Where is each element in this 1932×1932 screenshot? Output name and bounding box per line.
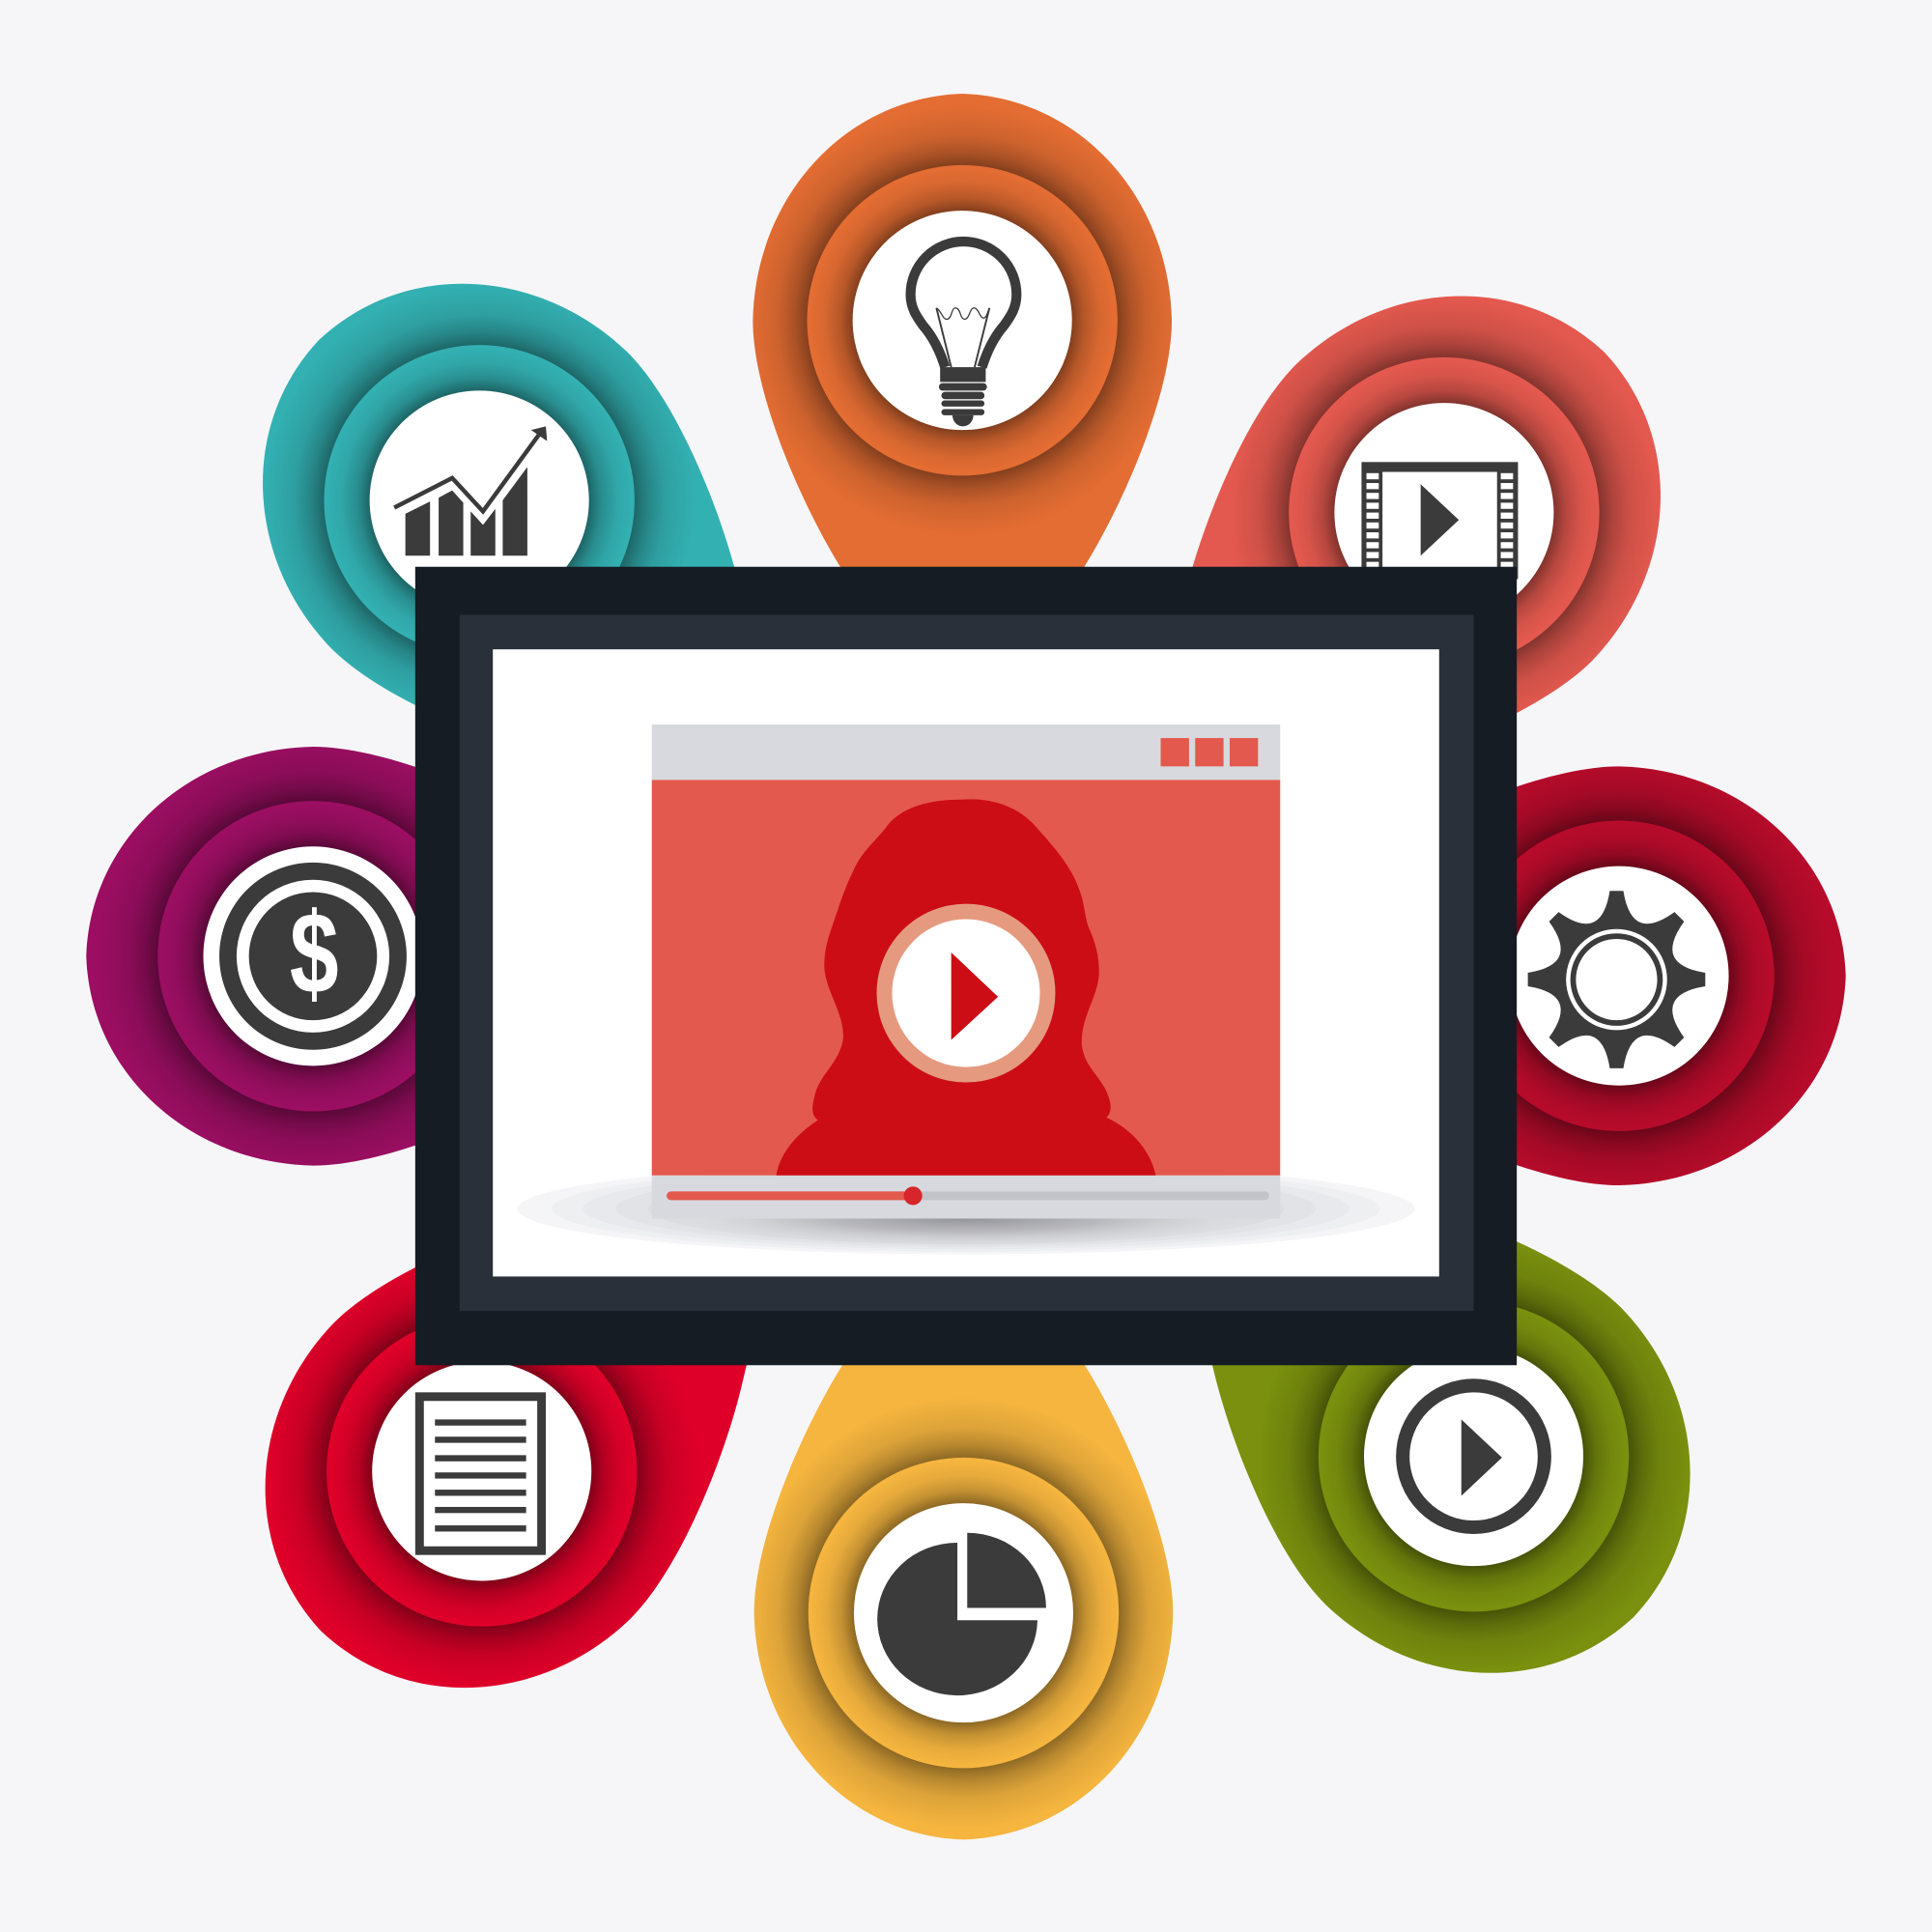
icon: dollar coin: $: [290, 889, 339, 1018]
play button: [877, 904, 1055, 1083]
petal: coral film: [1192, 296, 1661, 713]
icon: play button: [1403, 1385, 1545, 1527]
petal: green play: [1212, 1241, 1690, 1673]
petal: teal chart: [263, 284, 734, 705]
petal: orange idea: [753, 94, 1172, 567]
progress bar: [667, 1186, 1269, 1205]
icon: document: [415, 1392, 546, 1555]
panel: monitor frame: [415, 567, 1517, 1365]
petal: purple money: [86, 747, 415, 1166]
video player window: [652, 724, 1280, 1218]
icon: growth chart: [394, 426, 547, 555]
petal: red document: [265, 1267, 747, 1689]
petal: yellow pie: [753, 1365, 1173, 1839]
icon: light bulb: [911, 242, 1016, 426]
icon: gear: [1528, 891, 1705, 1068]
control bar: [652, 1176, 1280, 1218]
video area: [652, 780, 1280, 1176]
icon: dollar coin: [219, 863, 407, 1050]
hooded silhouette: [777, 799, 1155, 1176]
floor shadow: [518, 1163, 1414, 1254]
petal: crimson gear: [1517, 766, 1846, 1185]
icon: pie chart: [877, 1533, 1046, 1695]
window buttons: [1161, 738, 1258, 766]
player title bar: [652, 724, 1280, 780]
icon: film strip: [1361, 462, 1518, 579]
